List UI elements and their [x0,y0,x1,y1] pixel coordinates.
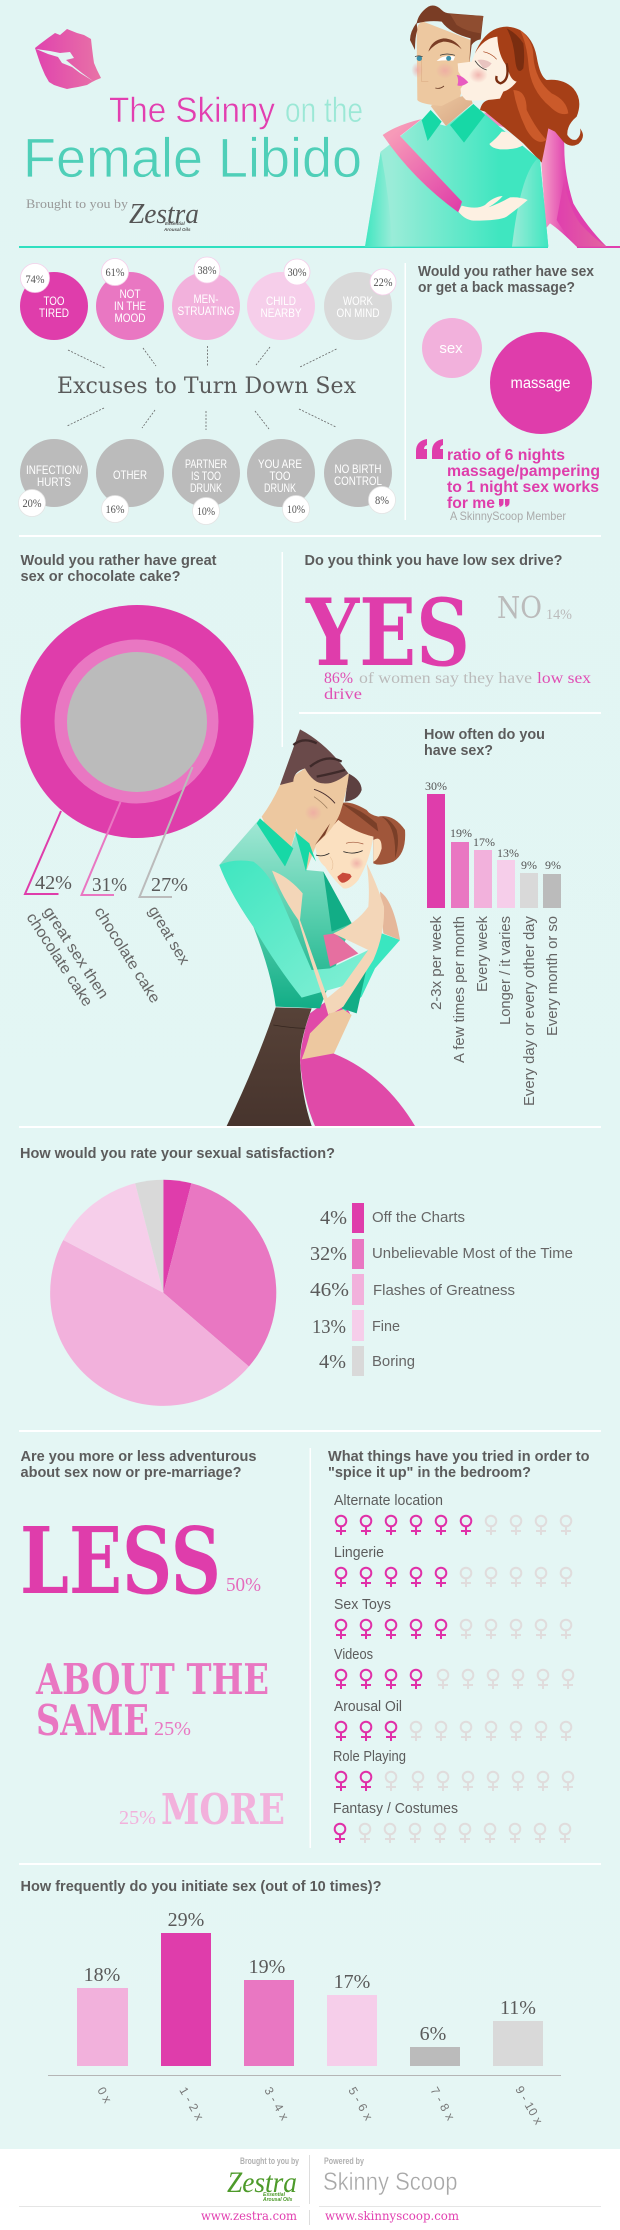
row: lingerie: Lingerie [334,1545,384,1561]
icon: lipstick kiss [35,29,101,89]
bar chart: 7 - 8 x [427,2084,458,2123]
donut labels: 42% [35,872,72,894]
heading: "spice it up" in the bedroom? [328,1465,531,1481]
caption: of women say they have [359,670,532,687]
excuse circles bottom row: DRUNK [190,481,222,495]
excuse circles top row: IN THE [114,299,146,313]
quote: to 1 night sex works [447,479,599,496]
bar chart: A few times per month [451,916,468,1063]
logo: Zestra: Zestra [227,2166,297,2199]
word: NO 14%: NO [497,591,542,626]
excuse circles bottom row [20,439,392,507]
quote: for me [447,495,495,512]
excuse circles top row: TOO [44,294,64,308]
title [23,91,363,189]
big word: MORE [119,1785,285,1834]
percentage badges: 10% [287,502,305,516]
heading: What things have you tried in order to [328,1449,590,1465]
bar chart: 2-3x per week [428,916,445,1010]
bar chart: 9% [521,858,537,872]
attribution: A SkinnyScoop Member [450,509,566,523]
illustration: couple kissing on the cheek [365,6,607,247]
row: alternate location [334,1493,571,1535]
excuse circles bottom row: NO BIRTH [334,462,382,476]
brought to you by: Brought to you by [240,2156,299,2166]
quote [447,447,600,512]
bar chart: 3 - 4 x [261,2084,292,2123]
row: sex toys [334,1597,571,1639]
bar chart: 13% [497,846,519,860]
panel: low sex drive [304,553,591,703]
caption [324,670,591,703]
heading: have sex? [424,743,493,759]
panel: sex or back massage [416,264,600,523]
big word: MORE: 25% [119,1807,156,1829]
row: alternate location: Alternate location [334,1493,443,1509]
excuse circles bottom row: INFECTION/ [26,463,83,477]
sponsor: brought to you by Zestra: Zestra [129,198,199,230]
panel: spice it up [328,1449,590,1843]
heading: about sex now or pre-marriage? [20,1465,242,1481]
row: arousal oil [334,1699,571,1741]
percentage badges: 8% [375,493,389,507]
row: sex toys: Sex Toys [334,1597,391,1613]
excuse circles bottom row: TOO [270,469,290,483]
big word: about the same: ABOUT THE [35,1655,269,1704]
excuse circles bottom row: IS TOO [191,469,221,483]
heading: Are you more or less adventurous [20,1449,256,1465]
word: NO 14% [497,591,572,626]
panel: excuses to turn down sex [18,257,396,524]
row: lingerie [334,1545,571,1587]
percentage badges: 22% [374,275,392,289]
big word: YES: YES [305,578,470,687]
big word: about the same: 25% [154,1718,191,1740]
legend [310,1203,573,1376]
bubble: massage [490,332,592,434]
row: arousal oil: Arousal Oil [334,1699,402,1715]
bar chart: Every day or every other day [521,916,538,1106]
bar chart: 9% [545,858,561,872]
bar chart: 17% [334,1971,370,1993]
bar chart: Every week [474,916,491,992]
illustration: embracing couple [219,729,415,1126]
donut labels [23,872,193,1010]
pie chart [50,1180,276,1406]
panel: how often do you have sex [424,727,561,1106]
percentage badges: 30% [288,265,306,279]
excuse circles top row: ON MIND [336,306,380,320]
percentage badges: 61% [106,265,124,279]
donut labels: 31% [92,874,127,896]
panel: how frequently do you initiate [20,1879,561,2127]
donut labels: 27% [151,874,188,896]
powered by: Powered by [324,2156,364,2166]
icon: quote mark [416,439,443,459]
percentage badges [18,257,396,524]
excuse circles top row: MOOD [114,311,146,325]
big word: LESS: 50% [226,1574,261,1596]
excuse circles top row: CHILD [266,294,296,308]
link: zestra: www.zestra.com [201,2209,298,2223]
header rule [19,246,548,248]
big word: LESS: LESS [20,1507,221,1615]
bar chart: 18% [84,1964,120,1986]
quote: ratio of 6 nights [447,447,565,464]
sponsor: brought to you by Zestra: Essential [165,221,186,226]
bar chart: 19% [249,1956,285,1978]
excuse circles top row: NOT [120,287,141,301]
bubble: sex: sex [439,340,463,357]
row: fantasy / costumes: Fantasy / Costumes [333,1801,458,1817]
excuse circles top row: WORK [343,294,373,308]
bar chart: 30% [425,779,447,793]
logo: Zestra: Arousal Oils [262,2197,293,2203]
bar chart: 1 - 2 x [176,2084,207,2123]
heading: How often do you [424,727,545,743]
title: on the [285,91,363,130]
sponsor: brought to you by Zestra: Brought to you by [26,196,129,211]
legend: 46% [310,1279,349,1301]
excuse circles top row: MEN- [194,292,218,306]
legend: 13% [312,1316,346,1338]
percentage badges: 20% [22,496,42,510]
caption: low sex [537,670,591,687]
row: videos: Videos [334,1647,373,1663]
bar chart: 5 - 6 x [345,2084,376,2123]
caption: 86% [324,670,353,687]
excuse circles top row: TIRED [39,306,69,320]
excuse circles bottom row: YOU ARE [258,457,302,471]
sponsor: brought to you by Zestra: Arousal Oils [163,227,191,232]
legend: Unbelievable Most of the Time [372,1245,573,1262]
big word: about the same: SAME [36,1696,149,1745]
legend: Flashes of Greatness [373,1282,515,1299]
donut labels: chocolate cake [91,904,163,1006]
donut labels: great sex then [40,904,112,1002]
legend: Boring [372,1353,415,1370]
row: role playing: Role Playing [333,1749,406,1765]
panel: adventurous [20,1449,285,1834]
percentage badges: 16% [106,502,124,516]
legend: 32% [310,1243,347,1265]
excuse circles bottom row: HURTS [37,475,71,489]
bubble: massage: massage [510,375,570,392]
panel: sex or chocolate cake [20,553,254,1010]
logo: Skinny Scoop: Skinny Scoop [323,2168,458,2196]
excuse circles top row [20,272,392,340]
excuse circles bottom row: PARTNER [185,457,227,471]
panel: sexual satisfaction [20,1146,573,1406]
heading: or get a back massage? [418,280,575,296]
excuse circles top row: STRUATING [178,304,234,318]
title: Female Libido [23,126,362,189]
heading: Would you rather have great [20,553,217,569]
excuse circles top row: NEARBY [260,306,302,320]
bar chart: 19% [450,826,472,840]
legend: Fine [372,1318,400,1335]
big word: MORE: MORE [161,1785,285,1834]
heading: Do you think you have low sex drive? [304,553,563,569]
caption: drive [324,686,362,703]
logo: Zestra: Essential [263,2192,286,2198]
row: fantasy / costumes [333,1801,570,1843]
donut labels: great sex [145,903,193,968]
big word: about the same [35,1655,269,1745]
bar chart: 0 x [94,2084,115,2105]
title: The Skinny [109,91,275,130]
footer [0,2149,620,2230]
percentage badges: 38% [198,263,216,277]
excuse circles bottom row: CONTROL [334,474,382,488]
heading: How would you rate your sexual satisfaction? [20,1146,335,1162]
word: NO 14%: 14% [546,607,572,623]
percentage badges: 10% [197,504,215,518]
bar chart [425,779,561,1106]
row: videos [334,1647,573,1689]
legend: Off the Charts [372,1209,465,1226]
bar chart [48,1909,561,2127]
bar chart: 29% [168,1909,204,1931]
bar chart: Every month or so [544,916,561,1036]
heading: How frequently do you initiate sex (out of 10 times)? [20,1879,382,1895]
heading: excuses: Excuses to Turn Down Sex [57,374,357,399]
donut labels: chocolate cake [23,910,96,1010]
quote: massage/pampering [447,463,600,480]
percentage badges: 74% [26,272,44,286]
sponsor: brought to you by Zestra [26,196,199,232]
bubble: sex [422,318,482,378]
bar chart: Longer / it varies [497,916,514,1025]
bar chart: 9 - 10 x [512,2084,546,2127]
legend: 4% [320,1207,347,1229]
heading: Would you rather have sex [418,264,594,280]
bar chart: 11% [500,1997,536,2019]
bar chart: 6% [420,2023,446,2045]
row: role playing [333,1749,573,1791]
bar chart: 17% [473,835,495,849]
donut chart [20,605,254,897]
link: skinnyscoop: www.skinnyscoop.com [325,2209,460,2223]
excuse circles bottom row: DRUNK [264,481,296,495]
excuse circles bottom row: OTHER [113,468,147,482]
heading: sex or chocolate cake? [20,569,181,585]
legend: 4% [319,1351,346,1373]
